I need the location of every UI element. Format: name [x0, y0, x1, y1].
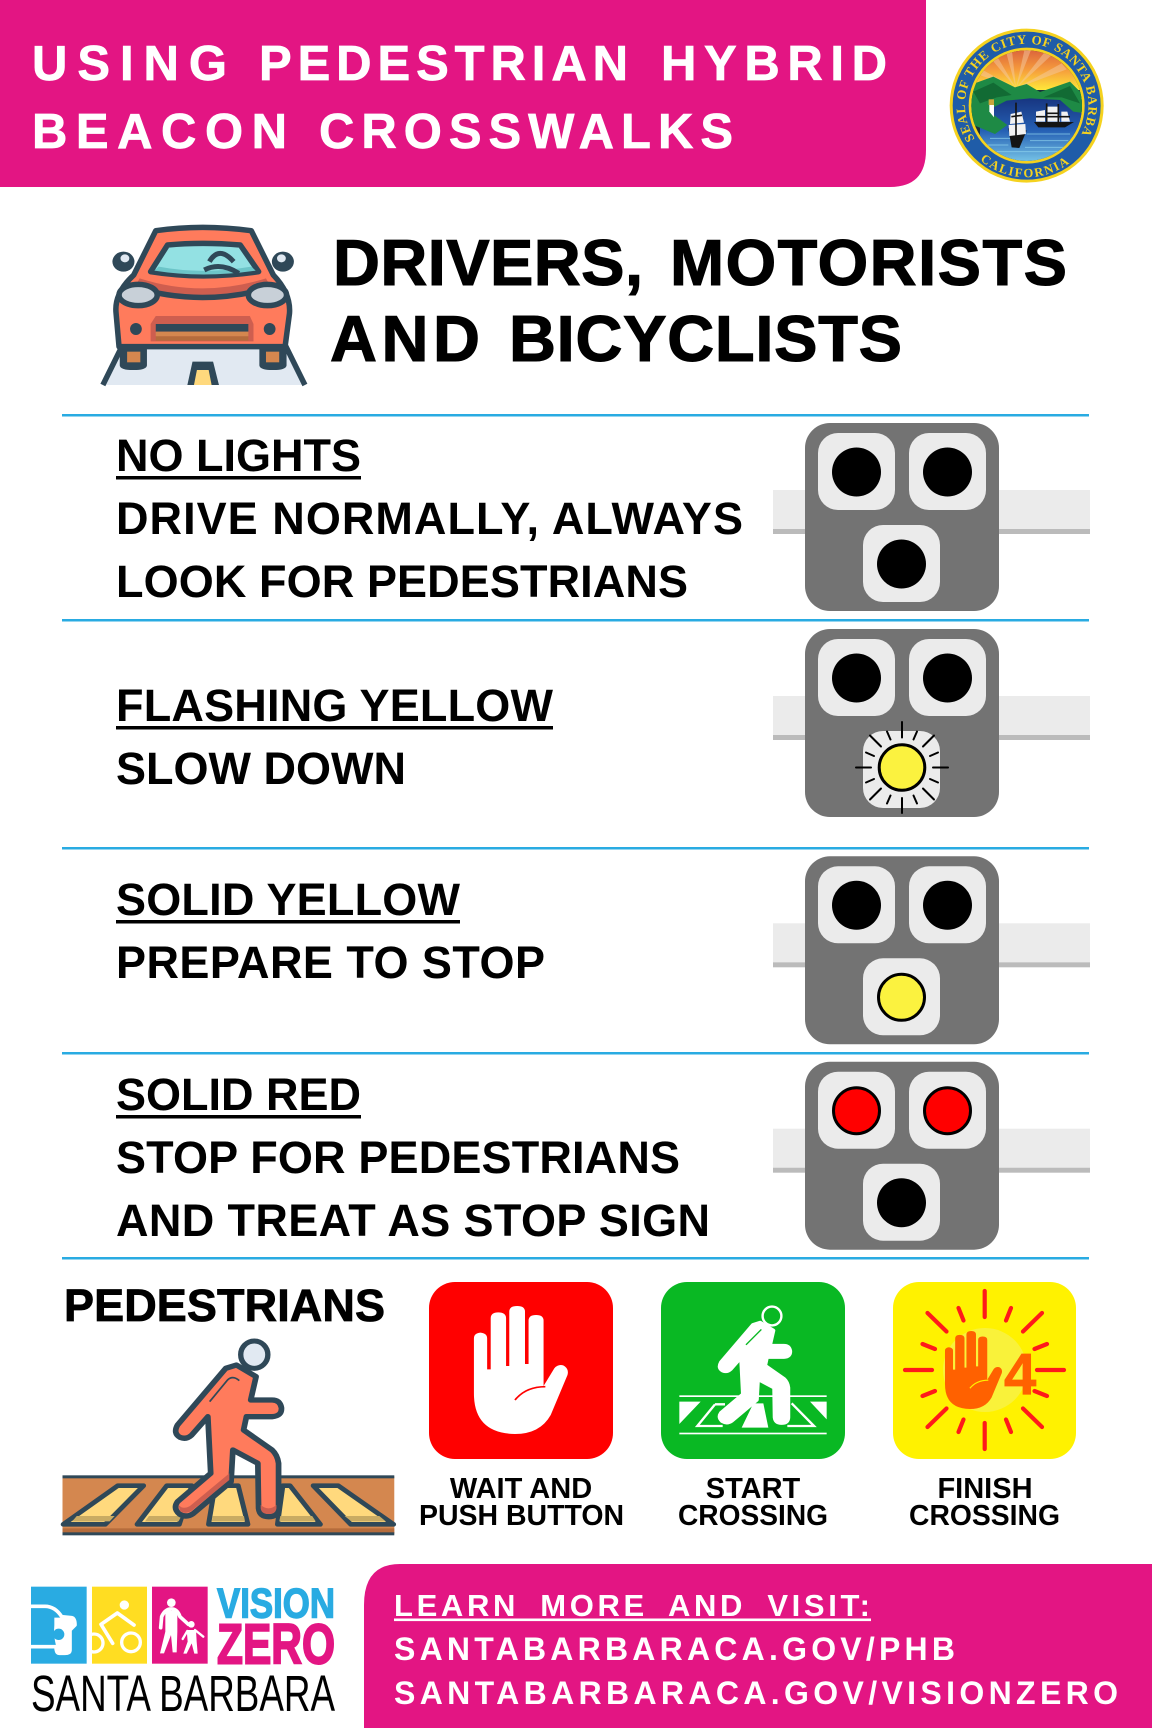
signal: solid yellow: [773, 856, 1090, 1044]
icon: car tile: [31, 1587, 87, 1664]
title line 1: USING: [32, 37, 227, 91]
title line 2: [32, 105, 733, 159]
row: solid red text: [116, 1069, 710, 1246]
logo: vision zero santa barbara: [31, 1586, 335, 1712]
countdown number: 4: [1004, 1342, 1036, 1407]
row: solid yellow text: PREPARE TO STOP: [116, 937, 545, 988]
row: flashing yellow text: FLASHING YELLOW: [116, 680, 554, 731]
logo text: vision: VISION: [217, 1580, 335, 1627]
icon: orange hand: [945, 1331, 1002, 1409]
row: solid yellow text: SOLID YELLOW: [116, 874, 461, 925]
title line 1: HYBRID: [661, 37, 887, 91]
icon: car on road: [103, 227, 305, 385]
icon: city seal: SEAL OF THE CITY OF SANTA BARBARA: [956, 35, 1098, 142]
icon: city seal: [950, 28, 1104, 183]
row: solid red text: AND TREAT AS STOP SIGN: [116, 1195, 710, 1246]
sign: finish crossing: [893, 1282, 1076, 1459]
icon: pedestrian on crosswalk: [62, 1341, 394, 1535]
label: start crossing: [678, 1473, 828, 1532]
heading: drivers: [330, 226, 1067, 375]
title line 2: BEACON: [32, 105, 287, 159]
row: flashing yellow text: SLOW DOWN: [116, 743, 406, 794]
title line 1: PEDESTRIAN: [259, 37, 628, 91]
icon: sun rays: [905, 1291, 1064, 1449]
label: wait and push button: [419, 1473, 624, 1532]
footer link: phb: SANTABARBARACA.GOV/PHB: [394, 1631, 955, 1667]
ship left: [1008, 127, 1027, 148]
header banner: [0, 0, 926, 187]
logo text: zero: ZERO: [217, 1613, 335, 1677]
icon: city seal: CALIFORNIA: [982, 155, 1070, 178]
row: flashing yellow text: [116, 680, 554, 794]
ship right: [1034, 122, 1074, 127]
footer panel: [364, 1564, 1152, 1728]
row: solid red text: STOP FOR PEDESTRIANS: [116, 1132, 680, 1183]
signal: flashing yellow: [773, 629, 1090, 817]
sign: start crossing: [661, 1282, 845, 1459]
title line 1: [32, 37, 887, 91]
logo text: santa barbara: SANTA BARBARA: [31, 1665, 335, 1722]
heading: pedestrians: PEDESTRIANS: [64, 1280, 385, 1331]
row: solid yellow text: [116, 874, 545, 988]
label: finish crossing: FINISH: [937, 1473, 1033, 1505]
title line 2: CROSSWALKS: [319, 105, 733, 159]
icon: pedestrians tile: [152, 1587, 208, 1664]
icon: cyclist tile: [92, 1586, 147, 1664]
label: finish crossing: CROSSING: [909, 1500, 1060, 1532]
icon: walking figure: [679, 1307, 827, 1434]
sign: wait and push button: [429, 1282, 613, 1459]
row: no lights text: DRIVE NORMALLY, ALWAYS: [116, 493, 743, 544]
label: wait and push button: WAIT AND: [450, 1473, 592, 1505]
label: finish crossing: [909, 1473, 1060, 1532]
label: start crossing: CROSSING: [678, 1500, 828, 1532]
icon: raised hand: [474, 1306, 568, 1434]
signal: no lights: [773, 423, 1090, 611]
row: solid red text: SOLID RED: [116, 1069, 361, 1120]
row: no lights text: [116, 430, 743, 607]
row: no lights text: LOOK FOR PEDESTRIANS: [116, 556, 688, 607]
heading: drivers: AND: [330, 302, 480, 375]
footer link: vision zero: SANTABARBARACA.GOV/VISIONZERO: [394, 1675, 1118, 1711]
signal: solid red: [773, 1062, 1090, 1250]
heading: drivers: MOTORISTS: [670, 226, 1067, 299]
row: no lights text: NO LIGHTS: [116, 430, 361, 481]
heading: drivers: DRIVERS,: [333, 226, 643, 299]
label: wait and push button: PUSH BUTTON: [419, 1500, 624, 1532]
heading: drivers: BICYCLISTS: [509, 302, 902, 375]
label: start crossing: START: [706, 1473, 801, 1505]
footer heading: LEARN MORE AND VISIT:: [394, 1588, 870, 1623]
